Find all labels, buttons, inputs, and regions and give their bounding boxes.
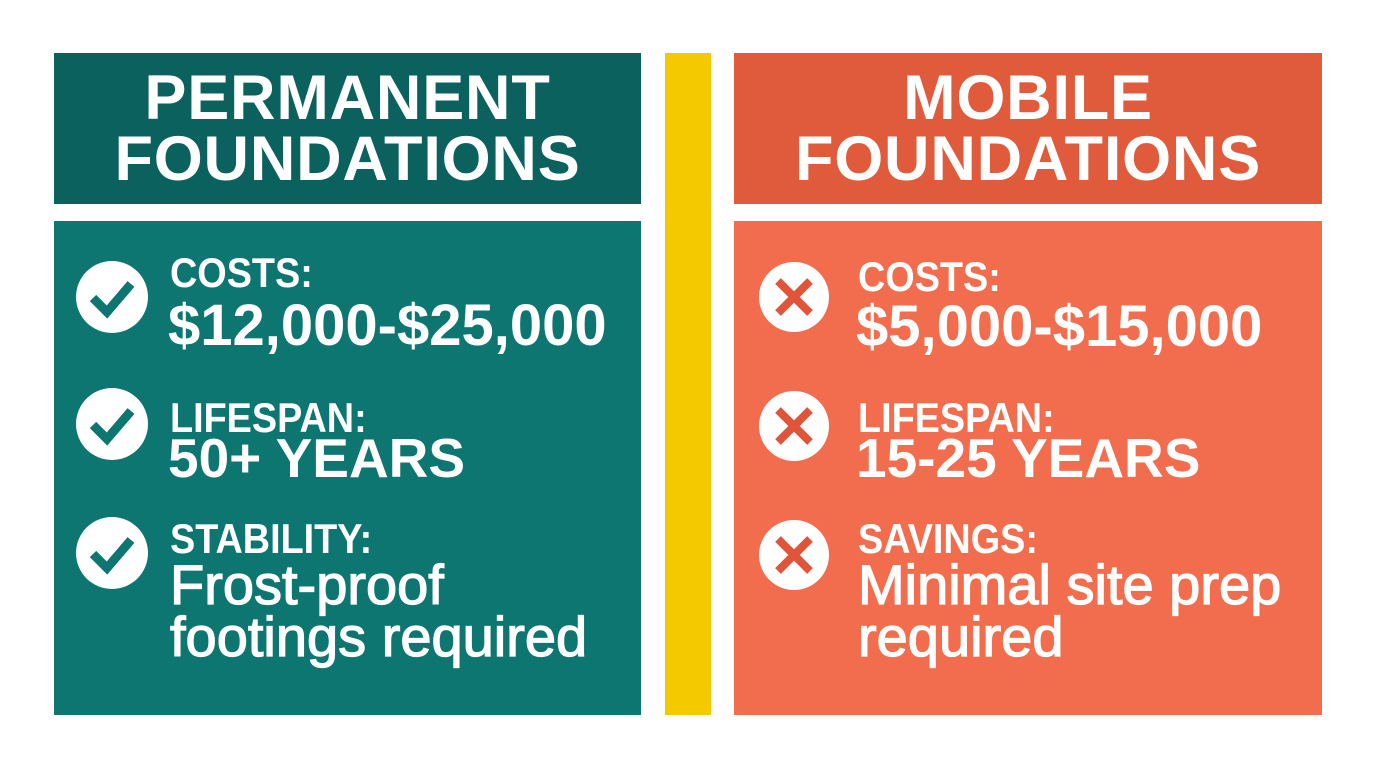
panel: permanent header (54, 53, 641, 204)
text: stability value (170, 553, 587, 668)
text: lifespan value: 50+ YEARS (168, 427, 465, 489)
icon: check 1 (76, 261, 148, 333)
text: costs value: $5,000-$15,000 (856, 294, 1262, 359)
text: costs: COSTS: (170, 249, 313, 296)
text: stability: STABILITY: (170, 515, 372, 562)
panel: permanent header: FOUNDATIONS (114, 124, 581, 194)
text: savings value: Minimal site prep (858, 553, 1281, 616)
text: lifespan: LIFESPAN: (170, 394, 367, 441)
text: stability value: Frost-proof (170, 553, 444, 616)
text: savings value (858, 553, 1281, 668)
icon: cross 1 (759, 262, 829, 332)
divider: yellow bar (665, 53, 711, 715)
text: savings value: required (858, 605, 1063, 668)
panel: permanent body (54, 221, 641, 715)
text: savings: SAVINGS: (858, 515, 1038, 562)
panel: mobile header: FOUNDATIONS (795, 124, 1261, 194)
text: costs: COSTS: (858, 253, 1001, 300)
text: lifespan value: 15-25 YEARS (856, 427, 1200, 489)
panel: mobile body (734, 221, 1322, 715)
panel: mobile header (734, 53, 1322, 204)
panel: permanent header: PERMANENT (144, 62, 551, 132)
icon: cross 2 (759, 391, 829, 461)
panel: mobile header: MOBILE (903, 62, 1153, 132)
icon: check 3 (76, 517, 148, 589)
text: lifespan: LIFESPAN: (858, 394, 1055, 441)
text: stability value: footings required (170, 605, 587, 668)
icon: cross 3 (759, 520, 829, 590)
icon: check 2 (76, 388, 148, 460)
text: costs value: $12,000-$25,000 (168, 293, 607, 358)
